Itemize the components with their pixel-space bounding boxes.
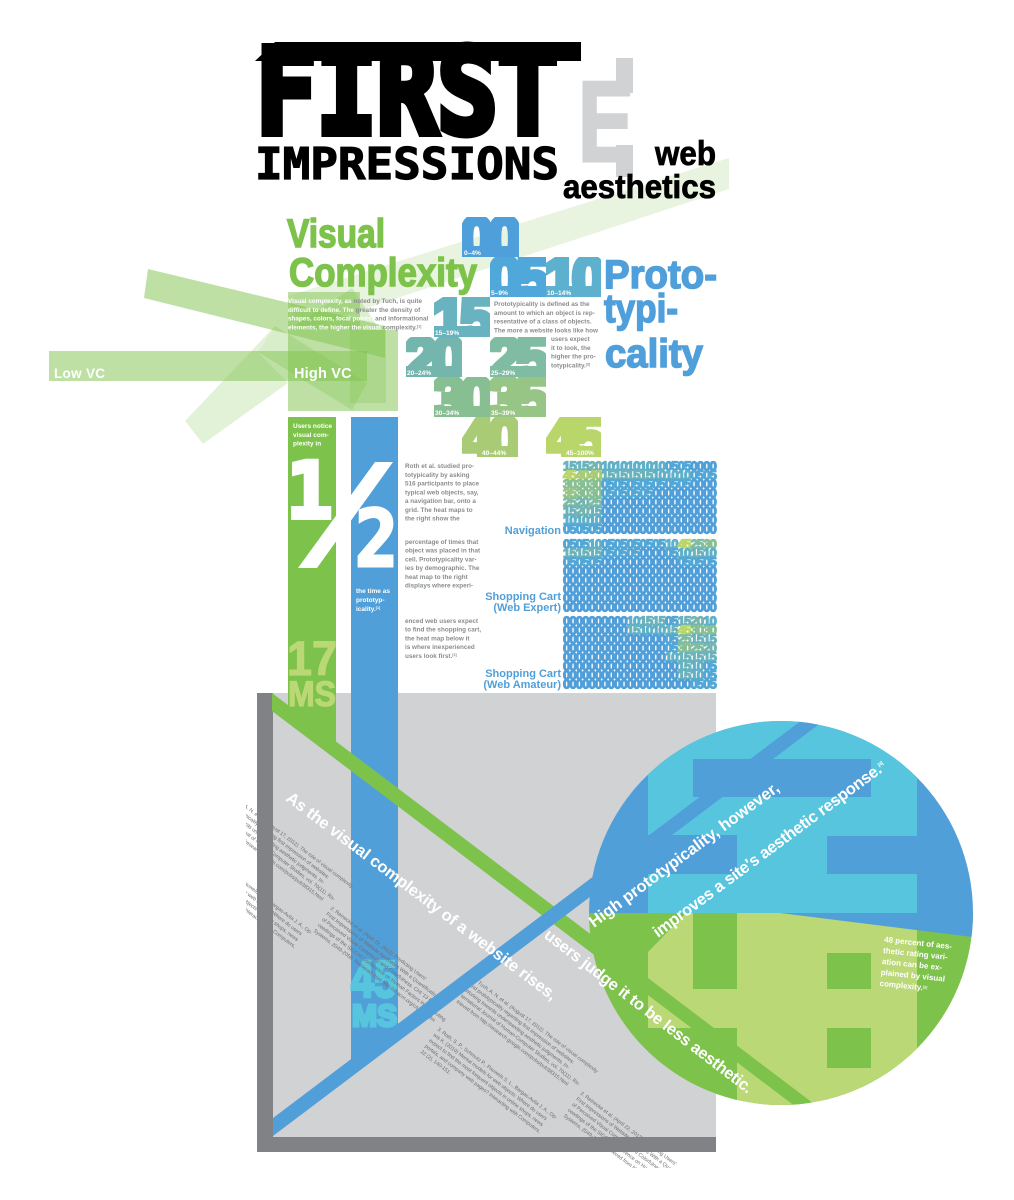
- text block: Roth study: [3]: [452, 653, 457, 657]
- references: ghost repeat: 1. Tuch, A. N. et al. (August 17, 2012). The role of visual complexity: [227, 792, 354, 890]
- title: web aesthetics: aesthetics: [563, 168, 716, 205]
- text block: Roth study: to find the shopping cart,: [405, 627, 481, 634]
- text block: prototypicality definition: it to look, the: [551, 345, 591, 352]
- heat map: shopping cart web expert: 000000000000000000000000: [563, 590, 716, 605]
- text block: Roth study: the heat map below it: [405, 635, 470, 642]
- number: 17 MS green: MS: [288, 675, 336, 714]
- text block: Roth study: heat map to the right: [405, 574, 469, 581]
- references: citations: trieved from http://research.google.com/pubs/pub38315.html: [455, 999, 569, 1087]
- heat map: navigation: 152015000000000000000000: [563, 504, 717, 518]
- text block: prototypicality definition: higher the pro-: [551, 354, 596, 361]
- number tile: 10: 10: [544, 246, 603, 312]
- text block: users notice: visual com-: [293, 432, 329, 439]
- label: Navigation: Navigation: [505, 525, 561, 537]
- title: IMPRESSIONS: IMPRESSIONS: [255, 139, 559, 190]
- heat map: navigation: 353030050505050000000000: [563, 486, 717, 501]
- title: grey E: E: [578, 59, 634, 186]
- callout: 48 percent: plained by visual: [880, 968, 945, 984]
- references: citations: wis K. (2010) Mental models for web objects: Where do users: [432, 1032, 548, 1122]
- number tile: 30: 30–34%: [435, 410, 459, 417]
- callout: 48 percent: 48 percent of aes-: [884, 935, 953, 951]
- number: 17 MS green: 17: [287, 633, 337, 686]
- callout: 48 percent: [2]: [923, 985, 927, 990]
- text block: Roth study: is where inexperienced: [405, 644, 475, 651]
- text block: prototypicality definition: The more a website looks like how: [494, 328, 598, 334]
- references: ghost repeat: expect to find the most frequent objects in online shops, news: [182, 853, 299, 943]
- heading: Prototypicality: cality: [605, 332, 704, 376]
- heat map: shopping cart web amateur: 000000000015101015453030: [563, 623, 717, 638]
- heat map: navigation: 050505000000000000000000: [563, 521, 716, 536]
- references: citations: of Perceived Visual Complexity and Colorfulness. CHI '13 Pro-: [570, 1102, 688, 1193]
- heat map: shopping cart web expert: [563, 537, 717, 614]
- text block: Roth study: 516 participants to place: [405, 481, 480, 488]
- text block: visual complexity definition: elements, the higher the visual complexity.: [288, 324, 417, 332]
- number tile: 30: 30: [432, 366, 491, 432]
- references: ghost repeat: [246, 804, 446, 1022]
- trend line: prototypicality (blue): [273, 796, 700, 1136]
- number tile: 35: 35: [488, 366, 548, 432]
- text block: Roth study: enced web users expect: [405, 618, 479, 625]
- references: ghost repeat: First Impressions of Website Aesthetics With a Quantification: [325, 911, 440, 1000]
- text block: visual complexity definition: [1]: [417, 324, 421, 328]
- heat map: navigation: 252025000000000000000000: [563, 494, 717, 510]
- text block: Roth study: typical web objects, say,: [405, 489, 479, 496]
- text block: Roth study: cell. Prototypicality var-: [405, 556, 477, 563]
- callout: 48 percent: complexity.: [879, 979, 928, 993]
- heading: Visual Complexity: Complexity: [289, 251, 478, 295]
- number: 45 MS on blue column: MS: [352, 998, 397, 1033]
- heat map: shopping cart web amateur: 000000000000000005251515: [563, 632, 717, 647]
- number: 45 MS on blue column: [351, 951, 397, 1033]
- text block: prototypicality definition: amount to which an object is rep-: [494, 310, 595, 317]
- big fraction one half: 1: [286, 447, 333, 537]
- statement: high prototypicality: improves a site's aesthetic response.: [650, 760, 885, 941]
- label: Shopping Cart (Web Expert): (Web Expert): [493, 602, 561, 614]
- number tile: 25: 25: [488, 326, 548, 392]
- number tile: 40: 40–44%: [482, 450, 506, 457]
- heat map: shopping cart web amateur: 000000000010151505152010: [563, 614, 717, 629]
- references: citations: portals, and company web pages? Interacting with Computers,: [423, 1044, 541, 1135]
- heat map: shopping cart web amateur: 000000000000000000000505: [563, 676, 716, 691]
- statement: visual complexity rises: As the visual complexity of a website rises,: [283, 789, 560, 1004]
- heat map: shopping cart web expert: 000000000000000000000000: [563, 599, 716, 614]
- label: Shopping Cart (Web Amateur): (Web Amateur): [483, 679, 561, 691]
- text block: Roth study: Roth et al. studied pro-: [405, 463, 474, 470]
- text block: the time as prototypicality: prototyp-: [356, 597, 385, 604]
- text block: prototypicality definition: users expect: [551, 336, 591, 343]
- text block: Roth study: object was placed in that: [405, 548, 481, 555]
- references: ghost repeat: 22 (2), 140-151.: [174, 864, 207, 891]
- references: citations: 1. Tuch, A. N. et al. (August 17, 2012). The role of visual complexity: [472, 977, 599, 1075]
- trend line: visual complexity (green): [272, 693, 700, 1035]
- title: web aesthetics: web: [654, 135, 716, 173]
- number tile: 00: 00: [460, 206, 519, 272]
- references: ghost repeat: trieved from http://research.google.com/pubs/pub38315.html: [210, 814, 324, 902]
- references: ghost repeat: 3. Roth, S. P., Schmutz P., Pauwels S. L., Bargas-Avila J. A., Op-: [191, 842, 313, 936]
- heat map: navigation: 101010000000000000000000: [563, 512, 716, 527]
- number tile: 40: 40: [460, 406, 519, 472]
- text block: Roth study: grid. The heat maps to: [405, 507, 473, 514]
- heading: Prototypicality: [604, 253, 717, 376]
- text block: visual complexity definition: difficult to define. The greater the density of: [288, 307, 420, 314]
- references: ghost repeat: and prototypicality regarding first impression of websites:: [223, 797, 330, 881]
- statement: visual complexity rises: [283, 789, 756, 1097]
- references: citations: 2. Reinecke et al. (April 22, 2013). Predicting Users': [579, 1091, 677, 1167]
- label: Shopping Cart (Web Amateur): Shopping Cart: [485, 668, 561, 680]
- text block: Roth study: displays where experi-: [405, 582, 473, 590]
- references: ghost repeat: of Perceived Visual Complexity and Colorfulness. CHI '13 Pro-: [320, 917, 438, 1008]
- number tile: 25: 25–29%: [491, 370, 515, 377]
- heading: Visual Complexity: [287, 212, 478, 295]
- references: ghost repeat: Systems, 2049-2058. Retrieved from http://dl.acm.org/citation.cfm: [312, 928, 436, 1024]
- panel: blue column: [351, 417, 398, 1075]
- number tile: 15: 15: [432, 286, 492, 352]
- statement: high prototypicality: High prototypicality, however,: [586, 779, 783, 931]
- number tile: 00: 0–4%: [464, 250, 481, 257]
- heading: Prototypicality: typi-: [604, 287, 678, 331]
- chart axes: [257, 693, 716, 1152]
- text block: prototypicality definition: [3]: [586, 362, 590, 366]
- references: citations: Working towards understanding aesthetic judgments. In-: [463, 988, 571, 1071]
- heat map: shopping cart web expert: 000000000000000000000000: [563, 582, 716, 596]
- references: citations: [420, 980, 677, 1168]
- heat map: shopping cart web expert: 000000000000000000000000: [563, 572, 716, 588]
- text block: users notice: plexity in: [293, 440, 321, 448]
- number tile: 35: 35–39%: [491, 410, 515, 417]
- references: ghost repeat: Working towards understanding aesthetic judgments. In-: [218, 803, 326, 886]
- text block: the time as prototypicality: [1]: [376, 606, 380, 610]
- heat map: shopping cart web expert: 151515050505000005101510: [563, 546, 717, 561]
- heat map: shopping cart web amateur: [563, 614, 717, 691]
- text block: Roth study: users look first.: [405, 653, 457, 660]
- heat map: shopping cart web amateur: 000000000000000005302520: [563, 641, 717, 656]
- title: FIRST: FIRST: [256, 23, 558, 161]
- heat map: shopping cart web amateur: 000000000000000000151005: [563, 658, 717, 674]
- panel: green column: [288, 417, 336, 746]
- text block: Roth study: a navigation bar, onto a: [405, 498, 476, 505]
- heat map: shopping cart web expert: 000000000000000000000000: [563, 564, 716, 579]
- panel: grey chart background: [257, 693, 716, 1152]
- references: citations: ternational Journal of Human-Computer Studies, vol. 70(11). Re-: [459, 994, 581, 1088]
- references: ghost repeat: ternational Journal of Human-Computer Studies, vol. 70(11). Re-: [214, 809, 336, 903]
- number: 17 MS green: [287, 633, 337, 714]
- references: citations: 3. Roth, S. P., Schmutz P., Pauwels S. L., Bargas-Avila J. A., Op-: [436, 1027, 558, 1121]
- text block: Roth study: percentage of times that: [405, 539, 479, 546]
- big fraction one half: 2: [355, 495, 398, 585]
- text block: the time as prototypicality: the time as: [356, 588, 390, 595]
- number tile: 45: 45: [544, 406, 604, 472]
- text block: visual complexity definition: Visual complexity, as noted by Tuch, is quite: [288, 298, 422, 305]
- heat map: navigation: [563, 459, 717, 536]
- text block: prototypicality definition: resentative of a class of objects.: [494, 319, 592, 326]
- text block: Roth study: the right show the: [405, 516, 460, 522]
- text block: the time as prototypicality: icality.: [356, 606, 380, 613]
- label: High VC: High VC: [294, 366, 352, 382]
- number tile: 05: 05: [488, 246, 548, 312]
- references: ghost repeat: ceedings of the SIGCHI Conference on Human Factors in Computing: [316, 923, 447, 1023]
- green light rays: [49, 158, 729, 444]
- references: citations: and prototypicality regarding first impression of websites:: [468, 982, 575, 1066]
- heat map: shopping cart web expert: 050505000000000000050505: [563, 555, 717, 570]
- heat map: shopping cart web expert: 050510050505050510452530: [563, 537, 717, 552]
- panel: high visual complexity box: [258, 288, 398, 411]
- references: citations: 22 (2), 140-151.: [419, 1049, 452, 1076]
- heading: Visual Complexity: Visual: [287, 212, 385, 256]
- heat map: navigation: 454040151515151010100505: [563, 468, 717, 483]
- text block: prototypicality definition: totypicality.: [551, 362, 590, 369]
- label: Low VC: Low VC: [54, 366, 105, 381]
- heat map: shopping cart web amateur: 000000000000000010151515: [563, 650, 717, 664]
- text block: users notice: Users notice: [293, 423, 332, 430]
- references: ghost repeat: wis K. (2010) Mental models for web objects: Where do users: [187, 847, 303, 937]
- heat map: navigation: 303030050505050505050000: [563, 477, 716, 492]
- text block: Roth study: ies by demographic. The: [405, 565, 480, 572]
- title: web aesthetics: [563, 135, 716, 205]
- statement: high prototypicality: [4]: [877, 760, 885, 768]
- number tile: 45: 45–100%: [566, 450, 594, 457]
- references: ghost repeat: 2. Reinecke et al. (April 22, 2013). Predicting Users': [329, 906, 427, 982]
- callout: 48 percent: thetic rating vari-: [883, 946, 948, 962]
- text block: Roth study: totypicality by asking: [405, 472, 470, 479]
- circle: magnified detail: [589, 721, 973, 1105]
- callout: 48 percent: ation can be ex-: [881, 957, 943, 972]
- number tile: 20: 20: [404, 326, 463, 392]
- text block: visual complexity definition: shapes, colors, focal points, and informational: [288, 316, 428, 323]
- number tile: 05: 5–9%: [491, 290, 508, 297]
- heat map: shopping cart web amateur: 000000000000000000151005: [563, 667, 717, 682]
- number tile: 20: 20–24%: [407, 370, 431, 377]
- number: 45 MS on blue column: 45: [351, 951, 397, 1009]
- text block: prototypicality definition: Prototypicality is defined as the: [494, 301, 590, 308]
- label: Shopping Cart (Web Expert): Shopping Cart: [485, 591, 561, 603]
- number tile: 15: 15–19%: [435, 330, 459, 337]
- heat map: navigation: 151520101010101005050000: [563, 459, 717, 474]
- big fraction one half: [286, 447, 398, 585]
- number tile: 10: 10–14%: [547, 290, 571, 297]
- references: citations: First Impressions of Website Aesthetics With a Quantification: [575, 1096, 690, 1185]
- statement: visual complexity rises: users judge it to be less aesthetic.: [541, 926, 756, 1097]
- references: ghost repeat: portals, and company web pages? Interacting with Computers,: [178, 859, 296, 950]
- references: citations: expect to find the most frequent objects in online shops, news: [427, 1038, 544, 1128]
- heading: Prototypicality: Proto-: [604, 253, 717, 297]
